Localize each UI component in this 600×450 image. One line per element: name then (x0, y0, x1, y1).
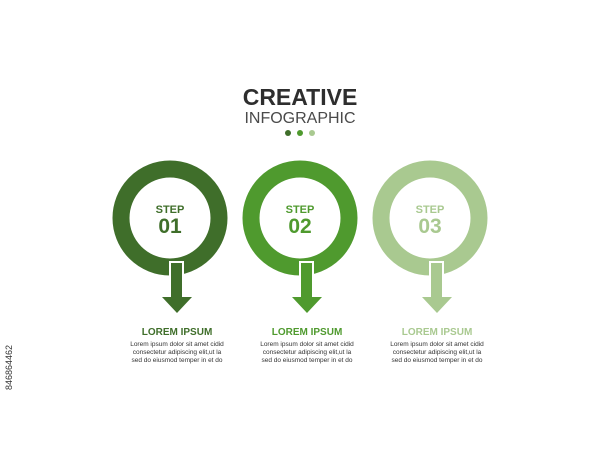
text block 3: LOREM IPSUM (402, 327, 472, 338)
text block 2: Lorem ipsum dolor sit amet cidid (260, 341, 354, 348)
step 1: STEP (156, 204, 184, 216)
step 1 (121, 169, 219, 313)
step 1: 01 (158, 215, 182, 238)
text block 2: LOREM IPSUM (272, 327, 342, 338)
text block 2 (260, 327, 354, 364)
text block 3 (390, 327, 484, 364)
step 2: STEP (286, 204, 314, 216)
step 3: STEP (416, 204, 444, 216)
title: CREATIVE (243, 84, 357, 110)
title (243, 84, 357, 127)
text block 2: sed do eiusmod temper in et do (261, 357, 353, 364)
text block 3: Lorem ipsum dolor sit amet cidid (390, 341, 484, 348)
text block 1: sed do eiusmod temper in et do (131, 357, 223, 364)
text block 2: consectetur adipiscing elit,ut la (263, 349, 351, 356)
text block 3: sed do eiusmod temper in et do (391, 357, 483, 364)
step 3 (381, 169, 479, 313)
text block 1: Lorem ipsum dolor sit amet cidid (130, 341, 224, 348)
dots (285, 130, 315, 136)
side id: 846864462 (4, 345, 14, 390)
text block 1: consectetur adipiscing elit,ut la (133, 349, 221, 356)
step 2: 02 (288, 215, 312, 238)
text block 1: LOREM IPSUM (142, 327, 212, 338)
step 3: 03 (418, 215, 442, 238)
text block 1 (130, 327, 224, 364)
text block 3: consectetur adipiscing elit,ut la (393, 349, 481, 356)
title: INFOGRAPHIC (244, 110, 356, 127)
step 2 (251, 169, 349, 313)
